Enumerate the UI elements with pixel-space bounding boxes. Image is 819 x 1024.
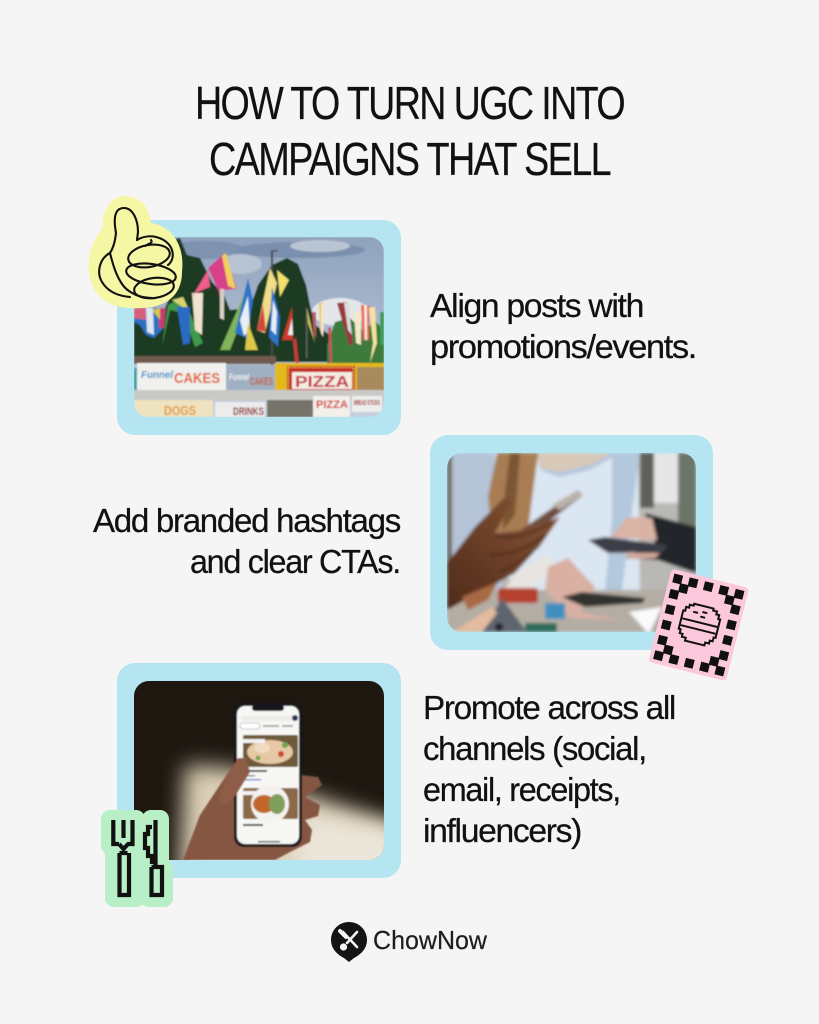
text: promote across channels: Promote across all [423,689,675,726]
photo: hands holding phones [447,453,696,632]
text: branded hashtags: Add branded hashtags [93,502,401,539]
text: align posts [430,287,696,365]
icon: fork and knife sticker [101,810,173,907]
title: HOW TO TURN UGC INTO [195,77,624,129]
title: CAMPAIGNS THAT SELL [209,133,611,185]
photo: fair stalls and flags: CAKES [250,376,273,388]
photo: fair stalls and flags: Funnel [141,370,173,381]
icon: pin with fork and spoon [331,922,367,962]
photo: fair stalls and flags: CAKES [174,370,220,387]
photo: fair stalls and flags: PIZZA [295,374,350,391]
text: align posts: promotions/events. [430,328,696,365]
text: branded hashtags [93,502,401,580]
photo: hand holding phone with food app [134,681,384,860]
photo: fair stalls and flags: BREAD STICKS [354,400,380,407]
panel: hashtags photo card [430,435,749,681]
logo: ChowNow: ChowNow [373,925,487,955]
text: promote across channels: email, receipts, [423,771,620,808]
text: promote across channels: channels (social, [423,730,646,767]
icon: burger sticker [648,569,749,681]
photo: fair stalls and flags: DRINKS [233,406,264,418]
text: branded hashtags: and clear CTAs. [190,543,400,580]
panel: promote photo card [101,663,401,907]
photo: fair stalls and flags [134,237,384,418]
text: align posts: Align posts with [430,287,643,324]
panel: align posts photo card [88,196,401,435]
text: promote across channels: influencers) [423,812,581,849]
title [195,77,624,185]
photo: fair stalls and flags: Funnel [229,372,249,382]
text: promote across channels [423,689,675,849]
logo: ChowNow [331,922,487,962]
photo: fair stalls and flags: PIZZA [316,399,348,411]
icon: thumbs up sticker [88,196,182,308]
photo: fair stalls and flags: DOGS [164,403,196,418]
